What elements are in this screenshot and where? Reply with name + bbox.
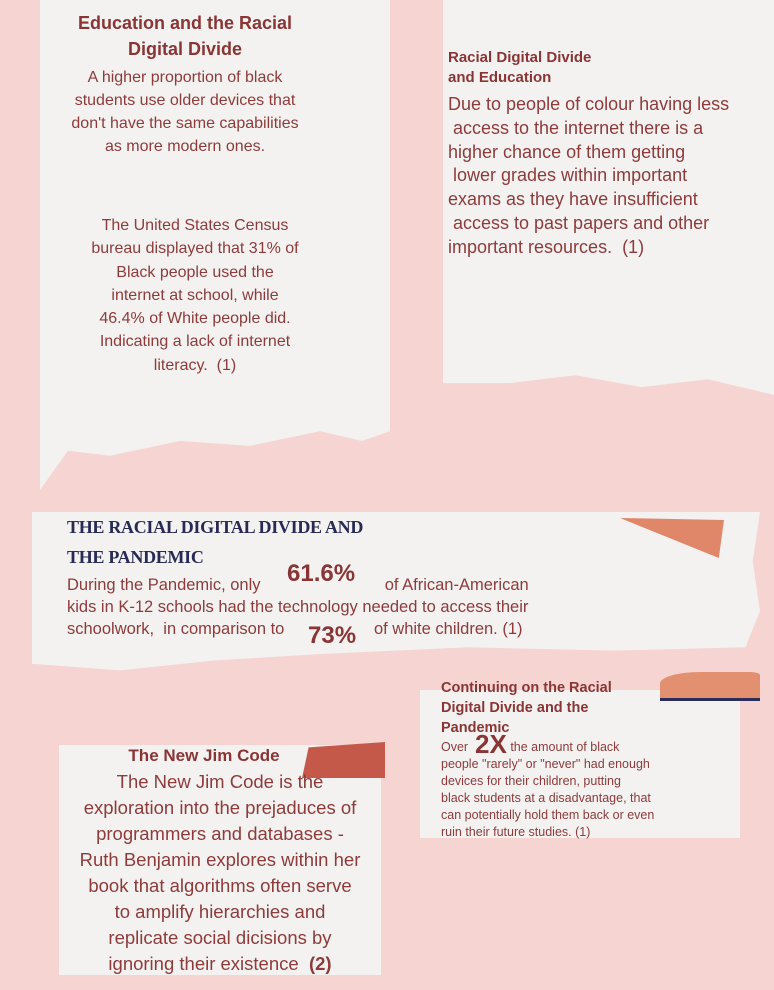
text: census statistic: bureau displayed that 31% of [91, 240, 299, 257]
text: older devices: as more modern ones. [105, 138, 265, 155]
stat: 73%: 73% [308, 622, 356, 649]
heading: continuing on the racial digital divide: Continuing on the Racial [441, 680, 612, 696]
panel: continuing pandemic box [420, 690, 740, 838]
heading: racial digital divide and the pandemic: THE RACIAL DIGITAL DIVIDE AND [67, 517, 363, 537]
text: jim code description: replicate social dicisions by [108, 927, 332, 948]
text: census statistic: literacy. (1) [154, 357, 236, 374]
heading: racial digital divide and education: Racial Digital Divide [448, 49, 591, 66]
text: census statistic: Indicating a lack of internet [100, 333, 290, 350]
panel: new jim code [59, 745, 381, 975]
text: lower grades [448, 96, 728, 257]
text: older devices: A higher proportion of black [88, 69, 282, 86]
text: older devices [72, 70, 298, 151]
heading: continuing on the racial digital divide: Pandemic [441, 720, 510, 736]
decoration: orange tape top right [660, 672, 760, 701]
text: census statistic: The United States Census [102, 217, 288, 234]
text: jim code description: The New Jim Code is the [117, 771, 323, 792]
text: pandemic statistic [68, 578, 528, 638]
text: older devices: don't have the same capabilities [71, 115, 299, 132]
stat: 61.6%: 61.6% [287, 560, 355, 587]
heading: continuing on the racial digital divide [441, 680, 612, 736]
heading: education and racial digital divide: Digital Divide [128, 39, 242, 59]
heading: racial digital divide and education [448, 51, 591, 82]
decoration: orange triangle [620, 518, 724, 558]
text: over 2X: can potentially hold them back or even [441, 808, 654, 822]
heading: racial digital divide and education: and Education [448, 69, 551, 86]
text: over 2X: people "rarely" or "never" had enough [441, 757, 650, 771]
text: jim code description: to amplify hierarchies and [115, 901, 325, 922]
text: pandemic statistic: During the Pandemic, only of African-American [67, 576, 529, 594]
text: over 2X: black students at a disadvantage, that [441, 791, 651, 805]
text: lower grades: access to the internet there is a [453, 118, 703, 138]
text: jim code description: book that algorithms often serve [88, 875, 352, 896]
heading: continuing on the racial digital divide: Digital Divide and the [441, 700, 588, 716]
text: jim code description: ignoring their existence (2) [108, 953, 332, 974]
panel: pandemic strip [32, 512, 760, 677]
text: lower grades: higher chance of them getting [448, 142, 685, 162]
text: census statistic: internet at school, while [111, 287, 279, 304]
text: jim code description: Ruth Benjamin explores within her [80, 849, 360, 870]
heading: the new jim code: The New Jim Code [128, 746, 280, 765]
panel: education left paper [40, 0, 390, 490]
text: lower grades: important resources. (1) [448, 237, 644, 257]
text: lower grades: access to past papers and other [453, 213, 709, 233]
heading: education and racial digital divide: Education and the Racial [78, 13, 292, 33]
text: lower grades: exams as they have insufficient [448, 189, 698, 209]
text: over 2X: devices for their children, putting [441, 774, 621, 788]
text: over 2X: ruin their future studies. (1) [441, 825, 590, 839]
text: over 2X: Over 2X the amount of black [441, 729, 619, 759]
panel: racial digital divide and education right paper [443, 0, 774, 395]
text: census statistic: 46.4% of White people did. [99, 310, 291, 327]
text: jim code description [80, 771, 360, 974]
heading: racial digital divide and the pandemic: THE PANDEMIC [67, 547, 204, 567]
text: lower grades: lower grades within important [453, 165, 687, 185]
text: jim code description: exploration into the prejaduces of [84, 797, 356, 818]
heading: racial digital divide and the pandemic [67, 521, 362, 563]
text: jim code description: programmers and databases - [96, 823, 344, 844]
text: census statistic: Black people used the [116, 264, 274, 281]
heading: education and racial digital divide [79, 16, 291, 59]
text: over 2X [441, 729, 654, 839]
text: pandemic statistic: schoolwork, in comparison to of white children. (1) [67, 620, 523, 638]
text: pandemic statistic: kids in K-12 schools had the technology needed to access their [67, 598, 528, 616]
text: older devices: students use older devices that [75, 92, 295, 109]
text: lower grades: Due to people of colour having less [448, 94, 729, 114]
text: census statistic [92, 218, 299, 374]
decoration: red tape [302, 742, 385, 778]
